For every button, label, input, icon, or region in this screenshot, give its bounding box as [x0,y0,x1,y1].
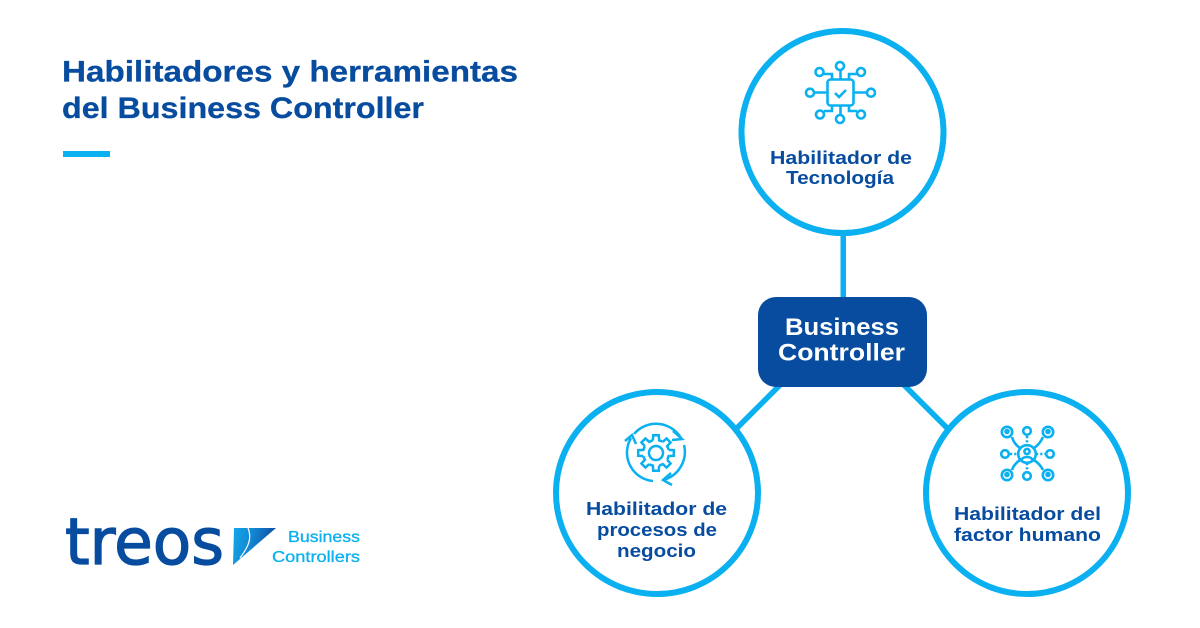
central box: Business Controller: Business [785,314,899,341]
panel: Habilitador de procesos de negocio [556,392,758,594]
icon: technology chip [806,62,875,123]
logo tagline: Controllers [272,549,360,566]
title accent bar [63,151,110,157]
logo: treos Business Controllers [65,506,360,580]
logo tagline: Business [288,529,360,546]
label: Habilitador de procesos de negocio [586,499,727,561]
label: Habilitador del factor humano [954,504,1101,545]
label: Habilitador del factor humano: Habilitador del [954,504,1101,524]
title: del Business Controller [62,92,424,125]
connector: bottom right [904,385,948,429]
label: Habilitador de procesos de negocio: Habilitador de [586,499,727,519]
icon: people network [1001,427,1054,480]
logo tagline [272,529,360,566]
label: Habilitador de Tecnología [770,148,912,188]
connector: bottom left [736,385,780,429]
label: Habilitador de procesos de negocio: negocio [617,541,696,561]
label: Habilitador de Tecnología: Habilitador de [770,148,912,168]
label: Habilitador de Tecnología: Tecnología [786,168,895,188]
logo wordmark: treos [65,506,224,580]
title: Habilitadores y herramientas [62,56,518,88]
connector: top [840,234,846,300]
central box: Business Controller: Controller [778,340,905,366]
title [62,56,518,125]
label: Habilitador del factor humano: factor humano [954,525,1101,545]
panel: Habilitador del factor humano [926,392,1128,594]
logo wing mark [233,528,276,565]
panel: Habilitador de Tecnología [742,31,944,233]
icon: gear with cycle arrows [625,424,685,485]
central box: Business Controller [758,297,927,387]
label: Habilitador de procesos de negocio: procesos de [597,520,717,540]
